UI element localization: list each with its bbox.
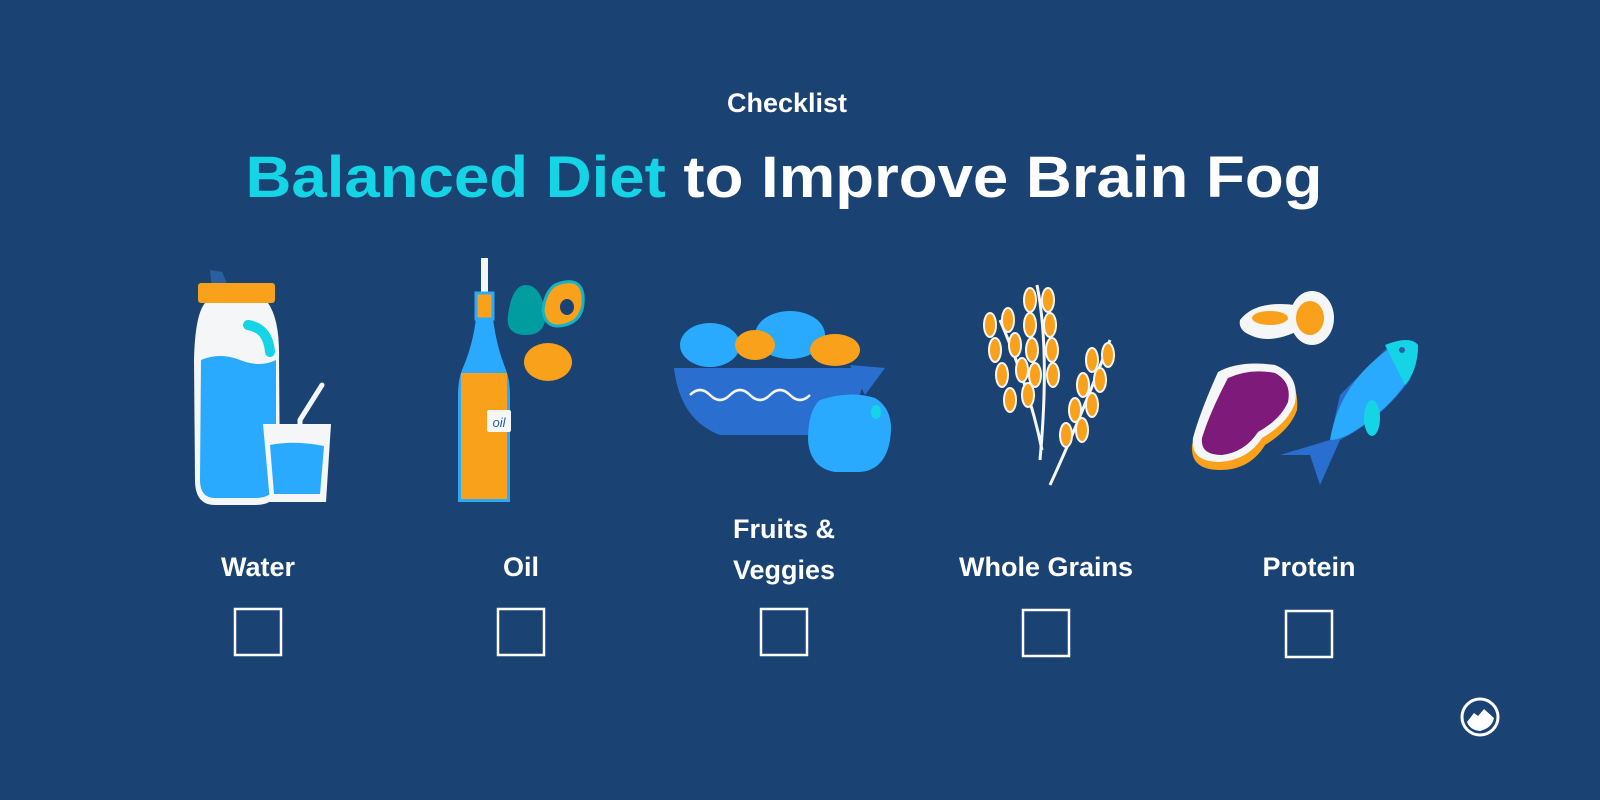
label: Water: Water: [221, 552, 295, 582]
icon: oil bottle with avocado and walnut: oil: [492, 415, 507, 430]
label: Protein: Protein: [1262, 552, 1356, 582]
logo: [1462, 699, 1498, 735]
icon: protein (eggs, steak, fish): [1192, 291, 1418, 485]
icon: fruit and veggie bowl with apple: [674, 311, 891, 472]
label: Fruits & Veggies: Veggies: [733, 555, 835, 585]
icon: water bottle and glass: [194, 270, 331, 505]
label: Fruits & Veggies: Fruits &: [733, 514, 835, 544]
icon: oil bottle with avocado and walnut: [458, 258, 583, 502]
icon: wheat stalks: [984, 285, 1114, 485]
title: Balanced Diet to Improve Brain Fog: [246, 145, 1322, 210]
subtitle: Checklist: Checklist: [727, 88, 847, 118]
label: Oil: Oil: [503, 552, 539, 582]
checkboxes: [235, 609, 1332, 657]
label: Whole Grains: Whole Grains: [959, 552, 1133, 582]
